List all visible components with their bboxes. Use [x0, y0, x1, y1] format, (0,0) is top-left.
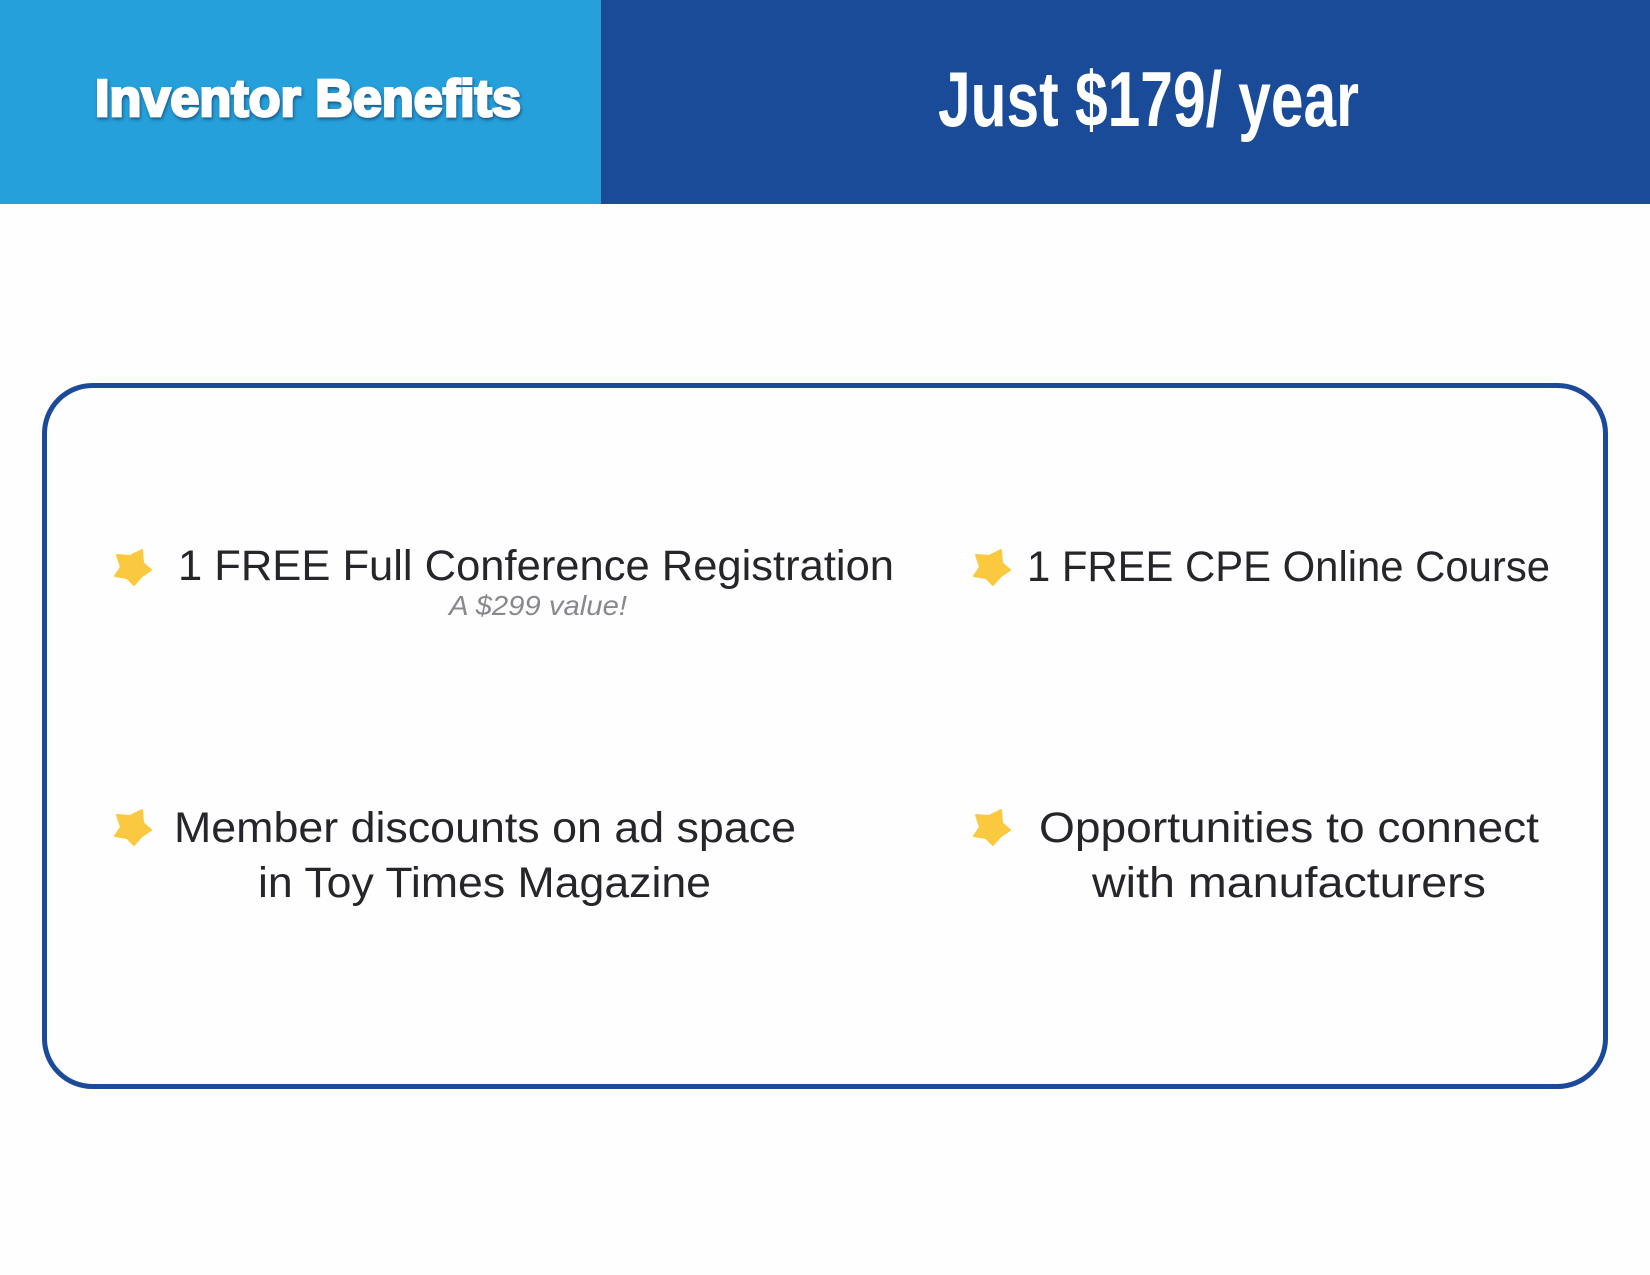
header band: light blue panel [0, 0, 601, 204]
benefit: conference registration: 1 FREE Full Conference Registration [178, 542, 894, 590]
note: value callout: A $299 value! [447, 590, 627, 621]
icon: star, online course [974, 550, 1010, 585]
icon: star, manufacturers [974, 810, 1010, 845]
benefit: connect with manufacturers [1039, 804, 1539, 907]
benefit: connect with manufacturers: Opportunities to connect [1039, 804, 1539, 852]
benefit: ad space discounts [174, 804, 796, 907]
header band: dark blue panel [601, 0, 1650, 204]
benefit: online course: 1 FREE CPE Online Course [1027, 543, 1550, 591]
benefit: ad space discounts: Member discounts on ad space [174, 804, 796, 852]
icon: star, conference registration [115, 550, 151, 585]
benefit: connect with manufacturers: with manufacturers [1091, 859, 1486, 907]
icon: star, ad space discounts [115, 810, 151, 845]
panel: benefits box [44, 386, 1606, 1086]
heading: price: Just $179/ year [938, 55, 1359, 143]
heading: Inventor Benefits: Inventor Benefits [95, 70, 521, 128]
benefit: ad space discounts: in Toy Times Magazine [258, 859, 711, 907]
